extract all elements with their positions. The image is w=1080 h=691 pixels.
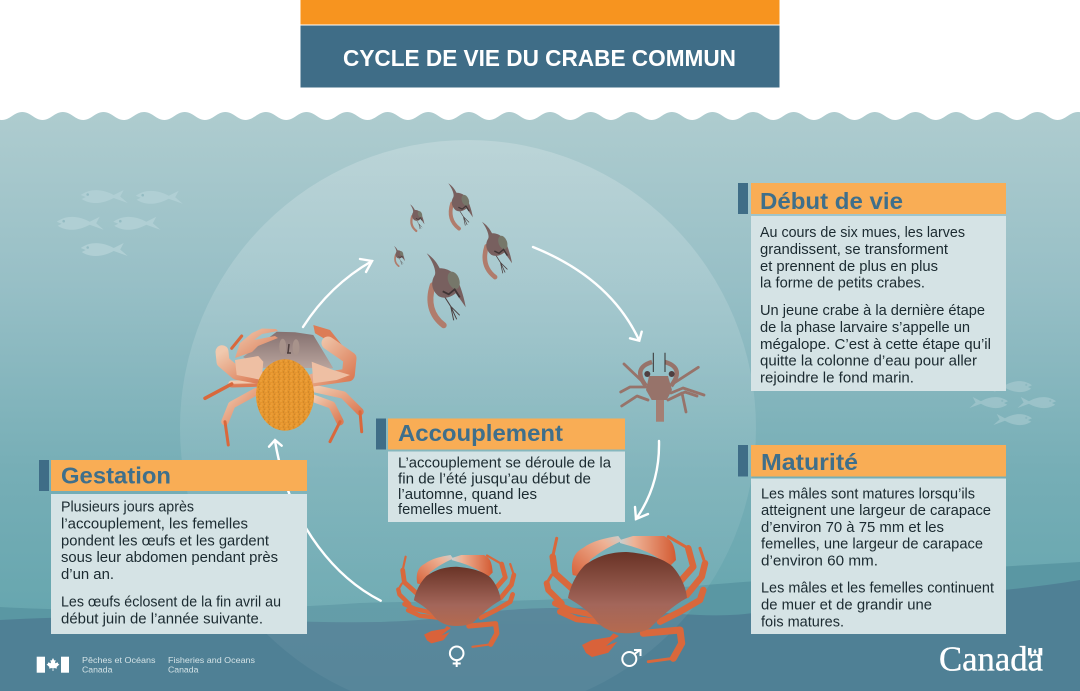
panel: Maturité (738, 445, 1006, 634)
arrow: adults to egg-bearing crab (269, 440, 381, 601)
panel: Début de vie: quitte la colonne d’eau pour aller (760, 354, 977, 370)
panel: Début de vie: Un jeune crabe à la dernière étape (760, 303, 985, 319)
panel: Accouplement: fin de l’été jusqu’au début de (398, 471, 591, 487)
panel: Gestation: Gestation (61, 462, 171, 488)
panel: Maturité: fois matures. (761, 614, 844, 630)
sea floor: dark layer (0, 580, 1080, 691)
panel: Gestation: Plusieurs jours après (61, 500, 194, 516)
panel: Gestation: Les œufs éclosent de la fin avril au (61, 595, 281, 611)
icon: female symbol (450, 646, 464, 667)
panel: Maturité: d’environ 70 à 75 mm et les (761, 520, 944, 536)
panel: Début de vie: mégalope. C’est à cette étape qu’il (760, 337, 991, 353)
panel: Maturité: Maturité (761, 449, 858, 475)
logo: Canada wordmark: Canada (939, 640, 1043, 679)
female crab (398, 555, 514, 647)
panel: Gestation (39, 460, 307, 634)
panel: Gestation: d’un an. (61, 567, 114, 583)
megalopa (621, 353, 704, 422)
fish school: left (57, 190, 183, 256)
panel: Début de vie: grandissent, se transforment (760, 242, 948, 258)
panel: Maturité: femelles, une largeur de carapace (761, 537, 983, 553)
icon: male symbol (622, 650, 640, 666)
fish school: right (969, 381, 1056, 425)
arrow: megalopa to adults (635, 441, 659, 519)
panel: Début de vie: Au cours de six mues, les larves (760, 225, 965, 241)
panel: Maturité: d’environ 60 mm. (761, 554, 878, 570)
title banner (300, 0, 780, 88)
panel: Accouplement: l’automne, quand les (398, 487, 537, 503)
male crab (547, 536, 705, 662)
panel: Début de vie: de la phase larvaire s’appelle un (760, 320, 970, 336)
panel: Gestation: sous leur abdomen pendant près (61, 550, 278, 566)
panel: Maturité: Les mâles sont matures lorsqu’ils (761, 486, 975, 502)
logo: Fisheries and Oceans signature: Canada (168, 665, 199, 675)
sea floor: light layer (0, 562, 1080, 691)
logo: Fisheries and Oceans signature: Pêches et Océans (82, 655, 156, 665)
crab with eggs (205, 325, 362, 445)
panel: Gestation: pondent les œufs et les gardent (61, 534, 269, 550)
panel: Maturité: de muer et de grandir une (761, 597, 932, 613)
panel: Gestation: l’accouplement, les femelles (61, 516, 248, 532)
panel: Accouplement (376, 418, 625, 522)
panel: Début de vie: la forme de petits crabes. (760, 276, 925, 292)
panel: Accouplement: femelles muent. (398, 502, 502, 518)
arrow: crab to larvae (303, 259, 372, 327)
panel: Maturité: atteignent une largeur de carapace (761, 503, 991, 519)
panel: Début de vie: rejoindre le fond marin. (760, 370, 914, 386)
panel: Début de vie: Début de vie (760, 188, 903, 214)
panel: Accouplement: Accouplement (398, 420, 563, 446)
large circle (180, 140, 756, 691)
panel: Gestation: début juin de l’année suivante. (61, 612, 263, 628)
arrow: larvae to megalopa (533, 247, 642, 341)
logo: Fisheries and Oceans signature (37, 655, 256, 675)
larvae group (394, 183, 512, 325)
panel: Début de vie: et prennent de plus en plus (760, 259, 938, 275)
panel: Maturité: Les mâles et les femelles continuent (761, 580, 994, 596)
egg mass (256, 359, 314, 431)
icon: Canadian flag (37, 657, 69, 673)
panel: Début de vie (738, 183, 1006, 391)
logo: Fisheries and Oceans signature: Canada (82, 665, 113, 675)
logo: Fisheries and Oceans signature: Fisheries and Oceans (168, 655, 256, 665)
panel: Accouplement: L’accouplement se déroule de la (398, 455, 612, 471)
title: CYCLE DE VIE DU CRABE COMMUN (343, 45, 736, 71)
